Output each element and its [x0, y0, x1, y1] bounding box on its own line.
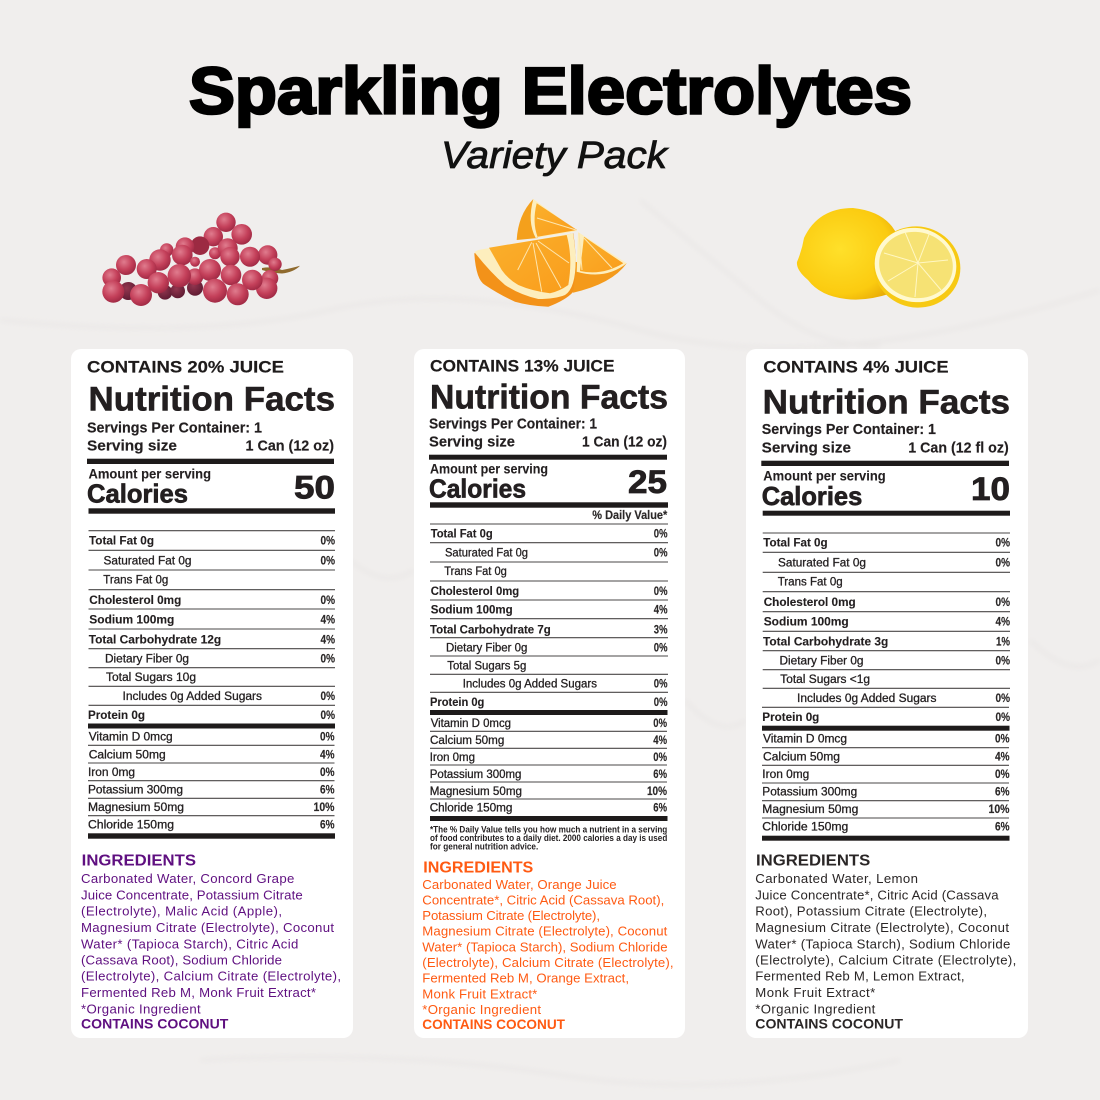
- nutrient table: orange: Sodium 100mg: [431, 602, 513, 616]
- nutrient table: grape: Total Carbohydrate 12g: [89, 632, 221, 646]
- nutrient table: grape: Dietary Fiber 0g: [105, 652, 189, 666]
- nutrient table: grape: 4%: [320, 749, 334, 761]
- icon: red grapes: [102, 213, 300, 306]
- nutrient table: lemon: 0%: [996, 597, 1010, 609]
- ingredients: orange: [422, 859, 674, 1032]
- heading: lemon juice content and nutrition facts: CONTAINS 4% JUICE: [763, 359, 949, 377]
- nutrient table: lemon: Iron 0mg: [762, 767, 809, 781]
- nutrient table: lemon: [762, 533, 1010, 841]
- nutrient table: lemon: Potassium 300mg: [762, 785, 857, 799]
- nutrient table: grape: Total Fat 0g: [89, 533, 154, 547]
- ingredients: lemon: Juice Concentrate*, Citric Acid (Cassava: [755, 887, 999, 902]
- calories: 50: [87, 467, 335, 514]
- heading: grape juice content and nutrition facts: Serving size: [87, 438, 177, 455]
- ingredients: lemon: INGREDIENTS: [756, 853, 870, 870]
- nutrient table: lemon: 0%: [995, 769, 1010, 781]
- calories: 25: Amount per serving: [430, 462, 548, 477]
- nutrient table: orange: Includes 0g Added Sugars: [463, 676, 597, 690]
- nutrient table: orange: 0%: [654, 697, 668, 709]
- calories: 10: 10: [971, 471, 1010, 507]
- nutrient table: lemon: Magnesium 50mg: [762, 802, 858, 816]
- icon: orange wedges: [474, 199, 627, 307]
- heading: orange juice content and nutrition facts: CONTAINS 13% JUICE: [430, 358, 615, 376]
- nutrient table: orange: 0%: [653, 752, 667, 764]
- nutrient table: lemon: 0%: [996, 656, 1010, 668]
- nutrient table: grape: 4%: [320, 614, 335, 626]
- ingredients: lemon: Root), Potassium Citrate (Electrolyte),: [755, 904, 987, 919]
- heading: lemon juice content and nutrition facts: [761, 359, 1010, 466]
- nutrient table: orange: 4%: [653, 735, 667, 747]
- nutrient table: grape: Trans Fat 0g: [103, 572, 168, 586]
- calories: 25: Calories: [429, 473, 526, 503]
- nutrient table: grape: Vitamin D 0mcg: [89, 730, 173, 744]
- nutrient table: orange: Trans Fat 0g: [444, 564, 507, 578]
- ingredients: grape: Juice Concentrate, Potassium Citrate: [81, 887, 303, 902]
- nutrient table: orange: Total Fat 0g: [431, 527, 493, 541]
- ingredients: grape: CONTAINS COCONUT: [81, 1016, 229, 1032]
- nutrient table: grape: 0%: [320, 535, 335, 547]
- nutrient table: grape: Saturated Fat 0g: [104, 553, 192, 567]
- calories: 10: Calories: [762, 481, 862, 511]
- ingredients: grape: Carbonated Water, Concord Grape: [81, 871, 294, 886]
- nutrient table: orange: 6%: [653, 802, 667, 814]
- ingredients: orange: Carbonated Water, Orange Juice: [422, 877, 617, 892]
- nutrient table: grape: 10%: [314, 802, 334, 814]
- nutrient table: grape: Potassium 300mg: [88, 783, 183, 797]
- nutrient table: lemon: 4%: [996, 616, 1010, 628]
- ingredients: lemon: CONTAINS COCONUT: [755, 1016, 903, 1032]
- nutrient table: lemon: 6%: [995, 787, 1010, 799]
- heading: grape juice content and nutrition facts: Servings Per Container: 1: [87, 419, 262, 436]
- ingredients: grape: Water* (Tapioca Starch), Citric Acid: [81, 936, 298, 951]
- ingredients: lemon: Fermented Reb M, Lemon Extract,: [755, 969, 965, 984]
- calories: 50: Calories: [87, 478, 188, 508]
- ingredients: orange: INGREDIENTS: [423, 859, 533, 876]
- nutrient table: orange: Potassium 300mg: [430, 767, 521, 781]
- nutrient table: grape: 4%: [320, 634, 335, 646]
- footnote: daily value: *The % Daily Value tells you how much a nutrient in a serving: [430, 824, 667, 834]
- ingredients: grape: Fermented Reb M, Monk Fruit Extract*: [81, 985, 316, 1000]
- nutrient table: orange: 4%: [654, 604, 668, 616]
- nutrient table: grape: 6%: [320, 785, 334, 797]
- nutrient table: grape: 0%: [320, 555, 335, 567]
- nutrient table: grape: Total Sugars 10g: [106, 670, 196, 684]
- nutrient table: lemon: 1%: [996, 636, 1010, 648]
- nutrient table: orange: 3%: [654, 624, 668, 636]
- ingredients: orange: (Electrolyte), Calcium Citrate (Electrolyte),: [422, 955, 674, 970]
- nutrient table: orange: Vitamin D 0mcg: [431, 716, 511, 730]
- heading: grape juice content and nutrition facts: 1 Can (12 oz): [246, 438, 334, 455]
- ingredients: orange: *Organic Ingredient: [422, 1002, 541, 1017]
- nutrient table: lemon: Protein 0g: [762, 710, 819, 724]
- nutrient table: orange: % Daily Value*: [592, 510, 668, 522]
- heading: grape juice content and nutrition facts: CONTAINS 20% JUICE: [87, 358, 284, 376]
- heading: orange juice content and nutrition facts: Serving size: [429, 434, 515, 451]
- ingredients: orange: Monk Fruit Extract*: [422, 986, 537, 1001]
- footnote: daily value: for general nutrition advice.: [430, 842, 538, 852]
- panel: lemon nutrition label: [746, 349, 1028, 1038]
- nutrient table: lemon: Total Sugars <1g: [780, 672, 870, 686]
- nutrient table: grape: Includes 0g Added Sugars: [122, 689, 262, 703]
- nutrient table: grape: 0%: [320, 595, 335, 607]
- nutrient table: orange: Cholesterol 0mg: [431, 584, 519, 598]
- nutrient table: grape: 0%: [320, 710, 335, 722]
- heading: grape juice content and nutrition facts: [87, 358, 335, 464]
- nutrient table: grape: Calcium 50mg: [89, 747, 166, 761]
- nutrient table: orange: 0%: [654, 529, 668, 541]
- nutrient table: lemon: 10%: [988, 804, 1010, 816]
- ingredients: grape: INGREDIENTS: [82, 853, 196, 870]
- ingredients: orange: Fermented Reb M, Orange Extract,: [422, 971, 629, 986]
- nutrient table: grape: 0%: [320, 691, 335, 703]
- nutrient table: grape: 0%: [320, 732, 334, 744]
- nutrient table: lemon: Trans Fat 0g: [778, 574, 843, 588]
- title: Sparkling Electrolytes: [189, 54, 912, 128]
- ingredients: grape: *Organic Ingredient: [81, 1001, 201, 1016]
- nutrient table: orange: 10%: [647, 786, 667, 798]
- ingredients: grape: (Cassava Root), Sodium Chloride: [81, 952, 282, 967]
- nutrient table: lemon: Total Carbohydrate 3g: [763, 634, 888, 648]
- ingredients: grape: [81, 853, 341, 1032]
- footnote: daily value: of food contributes to a daily diet. 2000 calories a day is used: [430, 833, 667, 843]
- ingredients: orange: Water* (Tapioca Starch), Sodium Chloride: [422, 939, 668, 954]
- footnote: daily value: [430, 824, 667, 852]
- icon: lemon: [797, 208, 968, 316]
- nutrient table: orange: 6%: [653, 769, 667, 781]
- nutrient table: orange: Magnesium 50mg: [430, 784, 522, 798]
- heading: orange juice content and nutrition facts: 1 Can (12 oz): [582, 434, 667, 451]
- nutrient table: grape: Protein 0g: [88, 708, 145, 722]
- heading: orange juice content and nutrition facts: Nutrition Facts: [430, 378, 668, 416]
- ingredients: grape: (Electrolyte), Malic Acid (Apple),: [81, 904, 282, 919]
- ingredients: lemon: Magnesium Citrate (Electrolyte), Coconut: [755, 920, 1009, 935]
- ingredients: lemon: Carbonated Water, Lemon: [755, 871, 918, 886]
- nutrient table: lemon: 4%: [995, 751, 1010, 763]
- heading: lemon juice content and nutrition facts: Serving size: [762, 439, 851, 456]
- panel: grape nutrition label: [71, 349, 353, 1038]
- nutrient table: lemon: 0%: [995, 734, 1010, 746]
- ingredients: orange: Potassium Citrate (Electrolyte),: [422, 908, 600, 923]
- nutrient table: orange: 0%: [654, 586, 668, 598]
- nutrient table: orange: Iron 0mg: [430, 750, 475, 764]
- nutrient table: orange: [430, 510, 668, 821]
- nutrient table: orange: 0%: [654, 678, 668, 690]
- calories: 10: Amount per serving: [763, 469, 886, 484]
- calories: 25: 25: [628, 464, 667, 500]
- calories: 50: 50: [294, 469, 335, 505]
- nutrient table: grape: Chloride 150mg: [88, 817, 174, 831]
- heading: lemon juice content and nutrition facts: Nutrition Facts: [763, 383, 1010, 421]
- nutrient table: lemon: Vitamin D 0mcg: [763, 732, 847, 746]
- nutrient table: lemon: 0%: [996, 712, 1010, 724]
- nutrient table: lemon: 0%: [996, 693, 1010, 705]
- nutrient table: grape: Iron 0mg: [88, 765, 135, 779]
- nutrient table: orange: 0%: [654, 548, 668, 560]
- nutrient table: grape: 0%: [320, 654, 335, 666]
- nutrient table: grape: [88, 531, 335, 839]
- ingredients: grape: (Electrolyte), Calcium Citrate (Electrolyte),: [81, 969, 341, 984]
- nutrient table: orange: Total Sugars 5g: [447, 658, 526, 672]
- ingredients: lemon: [755, 853, 1016, 1032]
- nutrient table: lemon: Total Fat 0g: [763, 535, 828, 549]
- nutrient table: orange: Total Carbohydrate 7g: [430, 622, 551, 636]
- nutrient table: lemon: Dietary Fiber 0g: [780, 654, 864, 668]
- calories: 25: [429, 462, 668, 508]
- nutrient table: grape: Magnesium 50mg: [88, 800, 184, 814]
- nutrient table: orange: 0%: [653, 718, 667, 730]
- calories: 10: [762, 469, 1010, 516]
- ingredients: lemon: *Organic Ingredient: [755, 1001, 876, 1016]
- subtitle: Variety Pack: [441, 135, 669, 177]
- ingredients: lemon: Water* (Tapioca Starch), Sodium Chloride: [755, 936, 1010, 951]
- ingredients: grape: Magnesium Citrate (Electrolyte), Coconut: [81, 920, 334, 935]
- nutrient table: lemon: 0%: [996, 537, 1010, 549]
- nutrient table: lemon: Chloride 150mg: [762, 819, 848, 833]
- nutrient table: orange: Chloride 150mg: [430, 800, 512, 814]
- ingredients: orange: Concentrate*, Citric Acid (Cassava Root),: [422, 892, 664, 907]
- ingredients: lemon: Monk Fruit Extract*: [755, 985, 875, 1000]
- nutrient table: grape: Cholesterol 0mg: [89, 593, 181, 607]
- nutrient table: grape: 6%: [320, 819, 334, 831]
- nutrient table: lemon: 6%: [995, 821, 1010, 833]
- panel: orange nutrition label: [414, 349, 685, 1038]
- nutrient table: lemon: Sodium 100mg: [764, 614, 849, 628]
- heading: grape juice content and nutrition facts: Nutrition Facts: [88, 381, 335, 419]
- nutrient table: grape: Sodium 100mg: [89, 612, 174, 626]
- nutrient table: orange: Dietary Fiber 0g: [446, 641, 527, 655]
- nutrient table: lemon: Saturated Fat 0g: [778, 555, 866, 569]
- nutrient table: orange: Calcium 50mg: [430, 733, 504, 747]
- ingredients: orange: Magnesium Citrate (Electrolyte), Coconut: [422, 924, 668, 939]
- ingredients: lemon: (Electrolyte), Calcium Citrate (Electrolyte),: [755, 952, 1016, 967]
- nutrient table: orange: Protein 0g: [430, 695, 484, 709]
- ingredients: orange: CONTAINS COCONUT: [422, 1016, 565, 1032]
- nutrient table: orange: 0%: [654, 643, 668, 655]
- calories: 50: Amount per serving: [88, 467, 211, 482]
- nutrient table: lemon: Cholesterol 0mg: [764, 595, 856, 609]
- nutrient table: lemon: Includes 0g Added Sugars: [797, 691, 936, 705]
- nutrient table: orange: Saturated Fat 0g: [445, 546, 528, 560]
- nutrient table: grape: 0%: [320, 767, 334, 779]
- heading: orange juice content and nutrition facts: Servings Per Container: 1: [429, 416, 597, 433]
- nutrient table: lemon: 0%: [996, 557, 1010, 569]
- heading: orange juice content and nutrition facts: [429, 358, 668, 460]
- heading: lemon juice content and nutrition facts: Servings Per Container: 1: [762, 421, 936, 438]
- nutrient table: lemon: Calcium 50mg: [763, 749, 840, 763]
- heading: lemon juice content and nutrition facts: 1 Can (12 fl oz): [908, 439, 1009, 456]
